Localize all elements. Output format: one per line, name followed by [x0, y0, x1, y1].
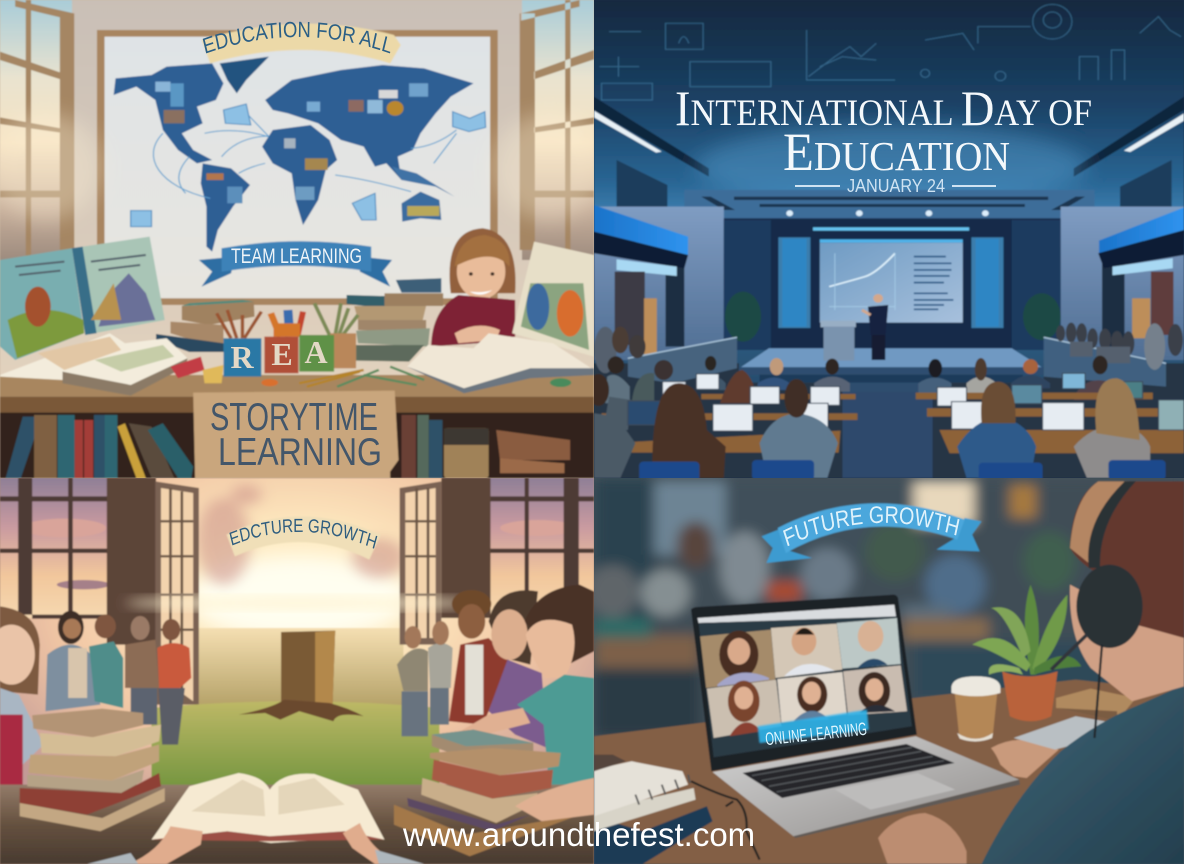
- desks: [602, 393, 1184, 453]
- screen text: online learning: ONLINE LEARNING: [764, 719, 868, 749]
- headset: [1051, 481, 1143, 738]
- blue wall signs: [594, 205, 1184, 276]
- world map: [114, 57, 473, 252]
- picture books left: [0, 237, 165, 360]
- notebooks: [594, 755, 713, 864]
- children's hands: [87, 823, 424, 864]
- panel: international day of education lecture hall: [588, 0, 1184, 483]
- blurred classroom background: [586, 478, 1184, 738]
- hair: [1070, 481, 1184, 638]
- balcony audience: [594, 323, 1183, 373]
- student shoulder: [982, 685, 1184, 864]
- ceiling soffit and vents: [684, 190, 1094, 220]
- watermark url: www.aroundthefest.com: [402, 816, 755, 853]
- heading: education for all: EDUCATION FOR ALL: [202, 22, 390, 54]
- crayons on table: [170, 357, 571, 387]
- main title: INTERNATIONAL DAY OF: [675, 80, 1092, 136]
- potted plants: [725, 292, 1061, 342]
- right window view: [489, 478, 594, 618]
- lower bookshelf: [0, 413, 594, 478]
- cardboard sign: [193, 391, 398, 478]
- distant landscape: [199, 628, 403, 708]
- sign text: storytime learning: [211, 402, 380, 466]
- trackpad: [835, 773, 955, 810]
- student neck and face: [1070, 585, 1184, 701]
- left window view: [0, 478, 110, 619]
- window pillars: [107, 478, 491, 645]
- side display panels: [778, 237, 1003, 328]
- holographic diagrams: [600, 4, 1181, 100]
- sun glow: [186, 558, 413, 638]
- left window: [0, 0, 74, 260]
- laptop base: [713, 736, 1020, 838]
- girl left foreground: [0, 606, 44, 805]
- whiteboard: [97, 30, 498, 305]
- front chairs: [639, 460, 1166, 483]
- hall background: [594, 0, 1184, 384]
- video call tiles: [700, 618, 907, 738]
- children right background: [397, 621, 453, 736]
- stage: [739, 348, 1044, 392]
- book tree: [239, 631, 364, 721]
- sign text: storytime learning: LEARNING: [218, 431, 382, 474]
- open book left: [0, 333, 188, 396]
- table: [0, 375, 594, 413]
- aisle and floor: [594, 363, 1184, 478]
- table: [0, 785, 594, 864]
- banner shape: [227, 516, 381, 560]
- side blackboards: [616, 160, 1172, 208]
- ceiling glow: [696, 123, 1087, 210]
- window glow: [0, 113, 606, 220]
- date: january 24: JANUARY 24: [847, 176, 945, 196]
- stack of books on desk right: [1056, 689, 1136, 721]
- panel: future growth sunrise: [0, 478, 594, 864]
- lens flare: [125, 595, 474, 611]
- ceiling beams: [594, 97, 1184, 177]
- letter blocks: [223, 335, 334, 377]
- left book stack: [20, 709, 165, 831]
- block letters: E: [271, 336, 293, 372]
- tablet: [1014, 716, 1115, 750]
- ribbon text: future growth: FUTURE GROWTH: [783, 506, 960, 546]
- pencil cups and pencils: [217, 303, 358, 368]
- earphone cable: [691, 781, 760, 860]
- bookshelves and doors: [615, 272, 1174, 362]
- group of children left: [45, 611, 191, 745]
- grass: [152, 701, 439, 788]
- projection screen: [813, 227, 969, 323]
- clouds: [197, 485, 405, 585]
- sign text: storytime learning: STORYTIME: [210, 396, 378, 439]
- floating books: [131, 104, 486, 227]
- laptop screen: [691, 595, 917, 771]
- curtains: [724, 220, 1061, 350]
- coffee cup: [951, 676, 1000, 741]
- sky: [0, 478, 594, 864]
- block letters: R: [230, 339, 254, 375]
- right book stack: [394, 730, 594, 856]
- open book right: [407, 333, 594, 393]
- children right foreground: [449, 585, 594, 790]
- student hand: [991, 740, 1059, 778]
- panel: online learning: [594, 478, 1184, 864]
- speaker: [862, 294, 888, 360]
- block letters: A: [304, 334, 328, 370]
- open window doors: [155, 481, 441, 705]
- cream banner shape: [202, 24, 401, 63]
- block letters: [231, 342, 328, 368]
- label: team learning: TEAM LEARNING: [231, 245, 362, 268]
- plant: [972, 585, 1081, 721]
- keyboard: [743, 744, 954, 798]
- picture book right: [512, 242, 594, 357]
- panel: education for all classroom: [0, 0, 594, 478]
- side walls: [594, 207, 1184, 360]
- banner text: edcture growth: EDCTURE GROWTH: [229, 518, 378, 549]
- future growth ribbon: [761, 503, 982, 563]
- laptops: [628, 373, 1184, 431]
- blue ribbon shape: [199, 241, 392, 287]
- railings: [628, 337, 1166, 387]
- middle row students: [603, 370, 758, 430]
- girl reading: [431, 228, 516, 347]
- right window: [520, 0, 594, 260]
- wall: [0, 0, 594, 376]
- open book center: [152, 773, 384, 843]
- podium: [821, 321, 856, 361]
- front row students: [588, 374, 1150, 478]
- wooden desk: [594, 680, 1184, 864]
- back row students: [605, 356, 1113, 403]
- main title: [675, 80, 1092, 182]
- book stacks: [156, 278, 443, 362]
- lower hand: [878, 813, 967, 864]
- flight lines: [153, 115, 456, 198]
- back wall: [724, 218, 1061, 350]
- online learning glow: [758, 710, 869, 743]
- main title: EDUCATION: [783, 122, 1010, 182]
